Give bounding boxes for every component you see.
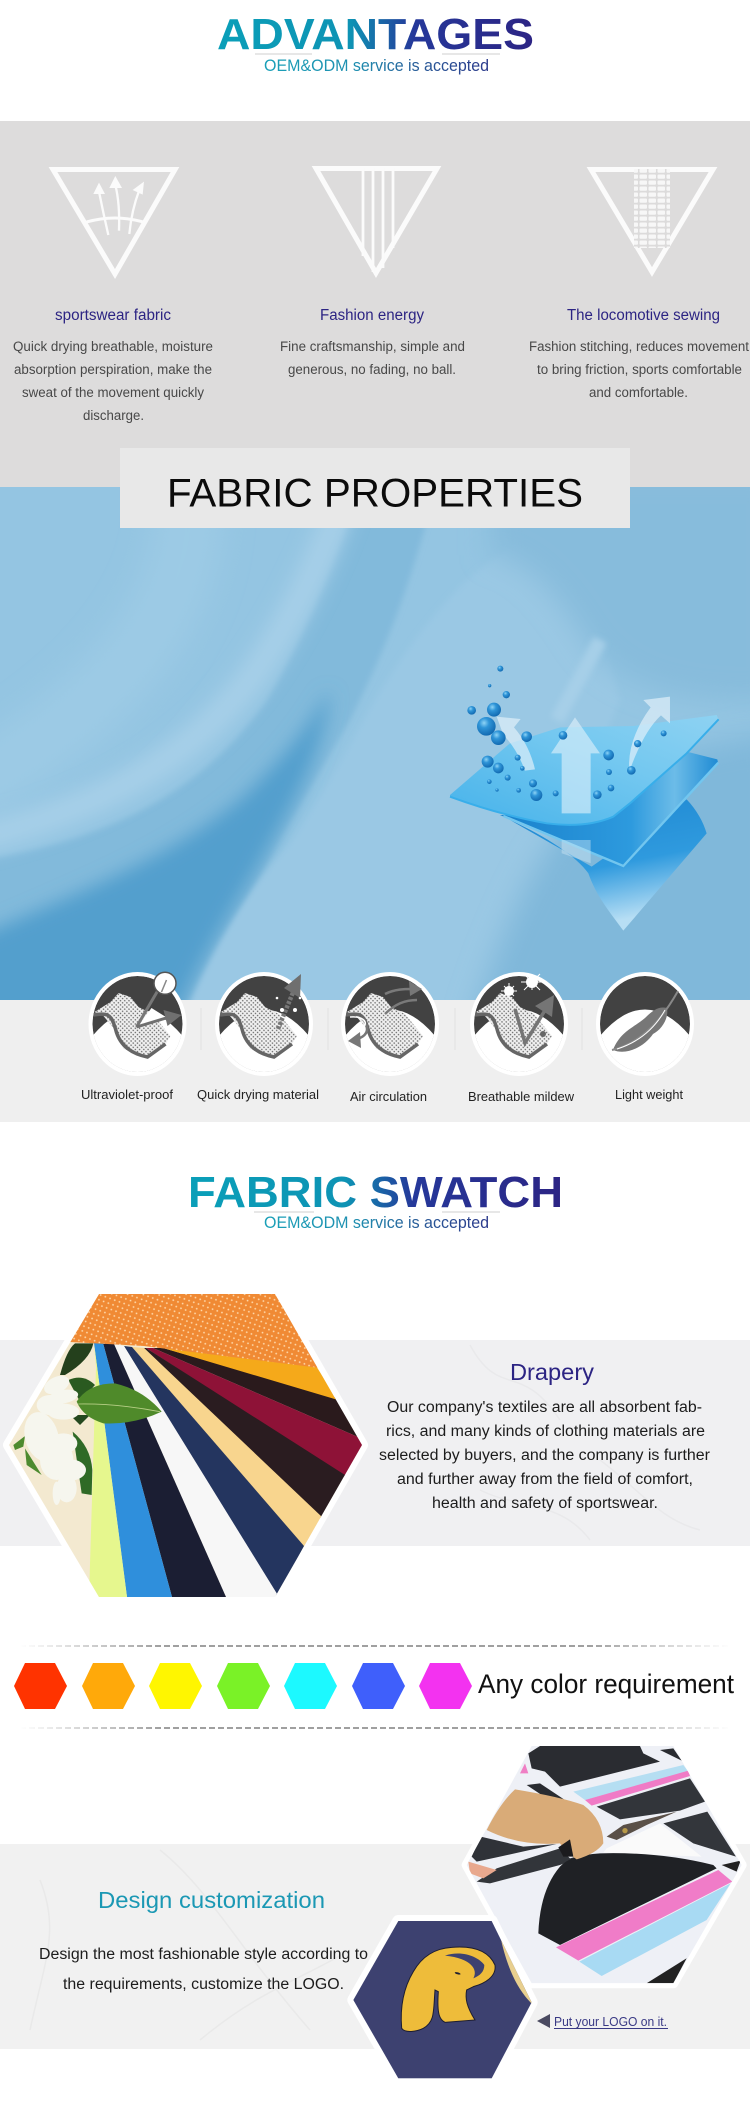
divider: bottom dashed line <box>20 1727 730 1729</box>
photo: logo hexagon <box>345 1915 542 2085</box>
text block: locomotive sewing: The locomotive sewing <box>567 307 720 324</box>
text block: fashion energy: Fashion energy <box>320 307 424 324</box>
text block: locomotive sewing <box>529 307 749 400</box>
panel: blue fabric background <box>0 470 750 1030</box>
fabric fan stripes <box>89 1343 365 1597</box>
swatch: magenta <box>419 1663 472 1709</box>
heading box: fabric properties: FABRIC PROPERTIES <box>167 472 583 516</box>
icon: stitching triangle <box>591 169 713 272</box>
icon: light weight feather <box>596 972 694 1076</box>
text block: locomotive sewing: and comfortable. <box>589 385 688 400</box>
callout: put your logo: Put your LOGO on it. <box>554 2015 667 2029</box>
right curved arrow <box>629 697 670 772</box>
text block: design customization: Design the most fashionable style according to <box>39 1946 368 1963</box>
top fabric sheet <box>450 715 719 825</box>
orange dotted fabric <box>70 1294 320 1368</box>
color swatch row <box>14 1663 735 1709</box>
text block: drapery: and further away from the field of comfort, <box>397 1471 693 1488</box>
heading: advantages: OEM&ODM service is accepted <box>264 57 489 75</box>
swatch: red <box>14 1663 67 1709</box>
panel: design customization <box>0 1844 750 2049</box>
label: light weight: Light weight <box>615 1087 683 1102</box>
text block: fashion energy <box>280 307 465 377</box>
big black shirt panel <box>538 1853 717 1945</box>
text block: sportswear fabric: sportswear fabric <box>55 307 171 324</box>
text block: fashion energy: Fine craftsmanship, simple and <box>280 339 465 354</box>
panel: advantages <box>0 121 750 487</box>
panel: fabric features strip <box>0 972 750 1122</box>
text block: sportswear fabric: sweat of the movement quickly <box>22 385 204 400</box>
scissors <box>607 1812 677 1840</box>
flowers and leaves <box>13 1343 162 1505</box>
text block: design customization: Design customization <box>98 1887 325 1913</box>
label: breathable mildew: Breathable mildew <box>468 1089 575 1104</box>
swatch: cyan <box>284 1663 337 1709</box>
text block: sportswear fabric: Quick drying breathable, moisture <box>13 339 213 354</box>
icon: quick drying <box>215 972 313 1076</box>
text block: design customization: the requirements, customize the LOGO. <box>63 1976 344 1993</box>
icon: ultraviolet-proof <box>88 972 186 1076</box>
text block: drapery: health and safety of sportswear. <box>432 1495 658 1512</box>
heading: advantages: ADVANTAGES <box>217 10 534 59</box>
label: quick drying material: Quick drying material <box>197 1087 319 1102</box>
text block: sportswear fabric: discharge. <box>83 408 144 423</box>
text block: design customization <box>39 1887 368 1993</box>
yellow R logo <box>401 1947 495 2031</box>
yellow fabric <box>144 1346 338 1400</box>
text block: drapery: Drapery <box>510 1359 595 1385</box>
arm and hand <box>487 1789 603 1859</box>
text block: drapery <box>379 1359 710 1512</box>
heading box: fabric properties <box>120 448 630 528</box>
text: any color requirement: Any color requirement <box>478 1669 735 1699</box>
icon: breathable arrows triangle <box>53 170 175 274</box>
icon: air circulation <box>341 972 439 1076</box>
swatch: blue <box>352 1663 405 1709</box>
panel: drapery <box>0 1340 750 1546</box>
photo: cutting fabric hexagon <box>460 1740 750 1990</box>
icon: breathable mildew <box>470 972 568 1076</box>
icon: fashion stripes triangle <box>316 168 437 273</box>
text block: fashion energy: generous, no fading, no ball. <box>288 362 456 377</box>
label: ultraviolet-proof: Ultraviolet-proof <box>81 1087 173 1102</box>
text block: drapery: rics, and many kinds of clothing materials are <box>386 1423 705 1440</box>
text block: sportswear fabric: absorption perspiration, make the <box>14 362 212 377</box>
swatch: yellow <box>149 1663 202 1709</box>
label: air circulation: Air circulation <box>350 1089 427 1104</box>
bottom fabric sheet <box>510 799 707 931</box>
left curved arrow <box>497 717 535 771</box>
photo: fabric swatches hexagon <box>0 1290 370 1600</box>
divider: top dashed line <box>20 1645 730 1647</box>
heading: fabric swatch: FABRIC SWATCH <box>188 1168 563 1217</box>
illustration: moisture wicking fabric layers <box>450 666 719 931</box>
middle fabric sheet <box>500 752 718 867</box>
center up arrow <box>551 717 600 863</box>
swatch: green <box>217 1663 270 1709</box>
text block: locomotive sewing: to bring friction, sports comfortable <box>537 362 742 377</box>
text block: drapery: selected by buyers, and the company is further <box>379 1447 710 1464</box>
text block: drapery: Our company's textiles are all absorbent fab- <box>387 1399 702 1416</box>
text block: sportswear fabric <box>13 307 213 423</box>
water bubbles <box>467 666 667 801</box>
text block: locomotive sewing: Fashion stitching, reduces movement <box>529 339 749 354</box>
heading: fabric swatch: OEM&ODM service is accepted <box>264 1214 489 1232</box>
swatch: orange <box>82 1663 135 1709</box>
